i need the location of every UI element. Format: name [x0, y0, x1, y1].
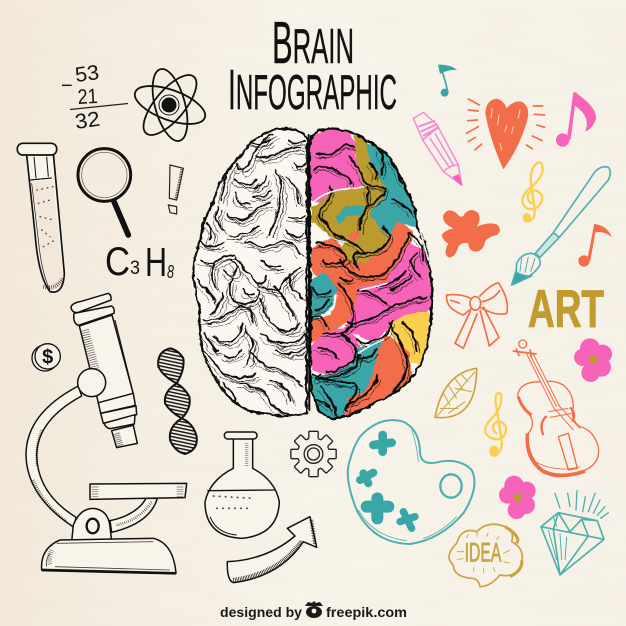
title: INFOGRAPHIC: [228, 58, 397, 122]
footer credit: freepik.com: [326, 604, 407, 620]
icon: coral music note: [578, 224, 612, 267]
right hemisphere colour patches: [311, 132, 432, 418]
icon: pink flower top: [574, 338, 612, 382]
icon: yellow treble clef: [522, 162, 543, 222]
brain: [193, 128, 432, 420]
footer credit: designed by: [220, 604, 302, 620]
math subtraction: −: [61, 75, 73, 97]
icon: freepik mascot: [305, 601, 323, 618]
icon: pink flower bottom: [499, 476, 536, 519]
icon: dollar coin: $: [42, 346, 53, 368]
arrow: [227, 517, 317, 583]
icon: second treble clef: [485, 393, 506, 456]
microscope arm: [26, 386, 82, 527]
icon: violin: [513, 340, 599, 476]
chemical formula: C: [105, 240, 130, 284]
microscope collars: [98, 393, 135, 413]
microscope pedestal: [72, 508, 112, 542]
icon: round flask: [205, 432, 279, 538]
icon: microscope: [26, 293, 187, 573]
microscope tube: [79, 315, 133, 404]
title: [228, 10, 397, 122]
right hemisphere base: [309, 128, 432, 418]
chemical formula: 8: [167, 262, 174, 282]
icon: idea cloud: IDEA: [465, 538, 501, 568]
icon: idea cloud: [449, 524, 522, 587]
math subtraction: [61, 61, 128, 134]
icon: magnifying glass: [78, 149, 131, 235]
icon: leaf: [435, 368, 477, 418]
icon: ribbon bow: [447, 283, 507, 348]
math subtraction: 21: [77, 85, 98, 109]
microscope eyepiece: [71, 293, 111, 313]
icon: exclamation mark: [168, 165, 183, 214]
microscope ball joint: [78, 369, 106, 397]
icon: atom: [130, 65, 210, 145]
left hemisphere, line art: [193, 128, 312, 419]
title: BRAIN: [272, 10, 354, 76]
icon: test tube: [17, 143, 64, 292]
right hemisphere outline and folds: [308, 128, 432, 420]
microscope lower arm: [110, 498, 157, 532]
icon: paint splat: [442, 210, 500, 257]
icon: teal music note: [438, 65, 457, 97]
icon: dollar coin: [32, 344, 60, 371]
icon: heart with rays: [466, 99, 545, 169]
microscope base: [42, 538, 176, 573]
palette paint blobs: [360, 435, 415, 528]
math subtraction: 32: [73, 108, 101, 134]
icon: pencil: [413, 112, 462, 185]
chemical formula: H: [145, 239, 167, 285]
chemical formula: 3: [130, 258, 140, 279]
icon: gear: [291, 431, 336, 477]
icon: pink music note: [556, 92, 596, 147]
footer credit: [220, 601, 407, 620]
chemical formula: [105, 239, 174, 285]
icon: paint brush: [512, 167, 610, 285]
icon: dna helix: [158, 348, 197, 454]
icon: diamond: [541, 491, 608, 575]
icon: artist palette: [348, 420, 474, 544]
math subtraction: 53: [74, 61, 100, 87]
microscope stage: [90, 483, 187, 499]
